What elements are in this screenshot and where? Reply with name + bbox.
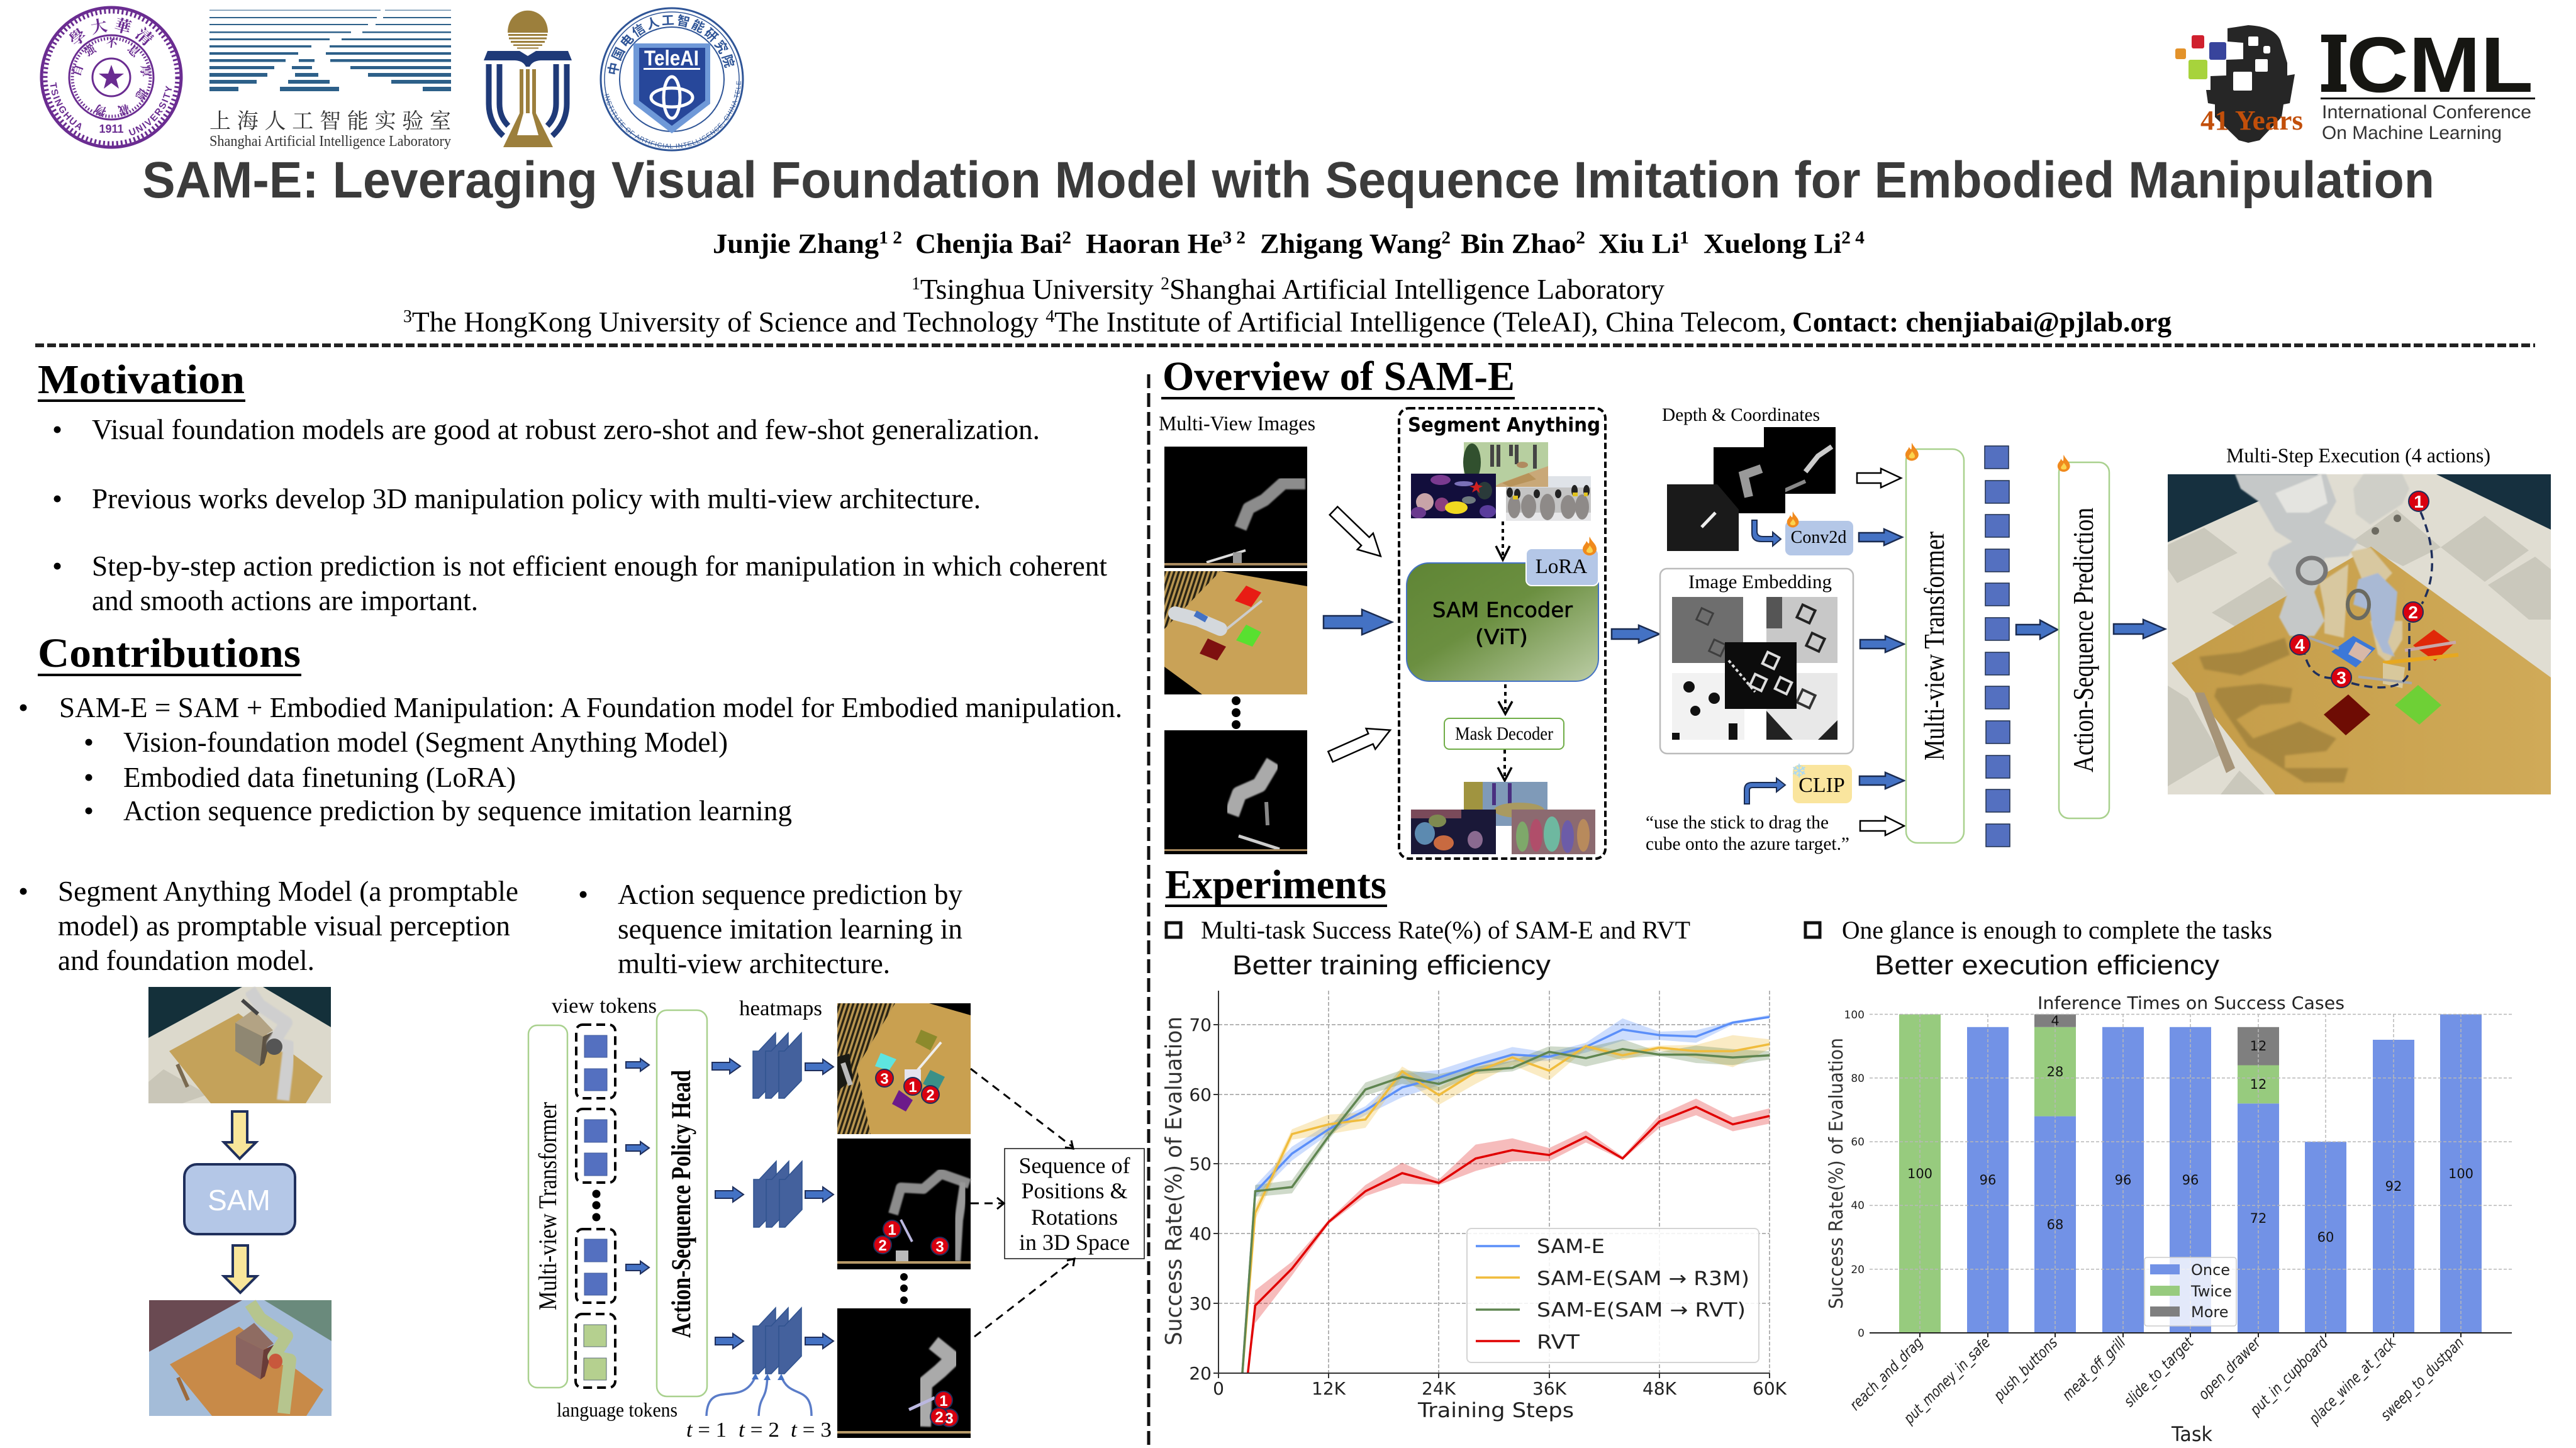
logo: Shanghai AI Laboratory: 上海人工智能实验室 — [209, 109, 451, 133]
affiliations: Contact: chenjiabai@pjlab.org — [1792, 306, 2172, 338]
dividers shadow — [35, 348, 2535, 352]
point numbers: 2 — [935, 1409, 944, 1426]
x labels — [1846, 1333, 2467, 1428]
value labels: 96 — [2115, 1172, 2131, 1188]
box: SAM Encoder — [1407, 563, 1598, 681]
y ticks — [1844, 1009, 1865, 1340]
labels: time steps: t = 1 — [686, 1418, 727, 1442]
x ticks: 48K — [1642, 1378, 1677, 1399]
execution points: 3 — [2336, 668, 2346, 688]
affiliations: 3 — [403, 307, 412, 326]
arrow: prediction to execution — [2114, 620, 2165, 638]
image: front view with predicted points — [837, 1308, 971, 1438]
point numbers — [878, 1071, 954, 1427]
value labels: 12 — [2250, 1039, 2267, 1054]
box: action-sequence policy head — [657, 1010, 707, 1396]
affiliations: The HongKong University of Science and Technology — [412, 306, 1045, 338]
box: multi-view transformer — [528, 1025, 567, 1388]
heading: Experiments: Experiments — [1165, 862, 1386, 908]
box: sequence output: in 3D Space — [1019, 1230, 1130, 1255]
token groups — [576, 1025, 615, 1388]
y ticks: 40 — [1189, 1223, 1212, 1244]
subheading: training — [1166, 916, 1690, 981]
predicted points — [874, 1069, 958, 1427]
table shadows — [2199, 638, 2348, 782]
authors: 2 — [1576, 228, 1585, 248]
logo: Tsinghua University: UNIVERSITY — [128, 86, 172, 135]
series: bands and lines — [1242, 1015, 1770, 1373]
text block: motivation bullets: • — [52, 550, 62, 582]
logo: Shanghai AI Laboratory: Shanghai Artificial Intelligence Laboratory — [209, 133, 451, 150]
box: Action-Sequence Prediction — [2059, 462, 2109, 818]
point numbers: 2 — [926, 1087, 935, 1104]
box: CLIP — [1793, 765, 1852, 803]
y ticks: 60 — [1189, 1084, 1212, 1105]
logo: ICML 41 Years: ICML — [2322, 21, 2533, 109]
value labels: 100 — [2448, 1166, 2473, 1181]
authors: 2 — [1441, 228, 1451, 248]
arrow: tokens to prediction — [2016, 620, 2058, 639]
text block: instruction: cube onto the azure target.” — [1646, 833, 1849, 854]
affiliations — [403, 273, 2172, 338]
text block: contributions bullets: Action sequence prediction by sequence imitation learning — [123, 794, 792, 827]
panel: Segment Anything — [1399, 408, 1605, 859]
image: segmented robot scene — [149, 1300, 332, 1416]
authors: 1 2 — [879, 228, 902, 248]
text block: SAM as foundation model — [18, 875, 518, 976]
authors: Haoran He — [1086, 228, 1217, 259]
y ticks: 40 — [1851, 1200, 1865, 1212]
authors: Xuelong Li — [1703, 228, 1835, 259]
box: LoRA: LoRA — [1536, 555, 1587, 578]
authors: 2 — [1062, 228, 1071, 248]
axis — [1870, 1333, 2512, 1337]
authors: Xiu Li — [1598, 228, 1675, 259]
box: sequence output — [1005, 1149, 1144, 1259]
box: SAM Encoder: SAM Encoder — [1432, 598, 1573, 622]
dashed execution path — [2305, 512, 2432, 688]
execution points: 4 — [2295, 635, 2305, 655]
logo: TeleAI: TeleAI — [644, 47, 699, 70]
axis titles: Task — [2171, 1422, 2212, 1446]
logo: TeleAI — [600, 8, 744, 151]
box: action-sequence policy head: Action-Sequence Policy Head — [667, 1070, 696, 1338]
box: Conv2d — [1785, 521, 1853, 555]
text block: motivation bullets — [52, 413, 1107, 616]
logo: Tsinghua University: 學大華清 — [69, 18, 154, 45]
labels: time steps: t = 3 — [791, 1418, 832, 1442]
value labels: 28 — [2047, 1064, 2063, 1079]
point numbers: 1 — [908, 1079, 917, 1096]
icon: flame LoRA — [1583, 537, 1597, 555]
grid — [1870, 1014, 2512, 1333]
value labels: 96 — [1980, 1172, 1996, 1188]
legend: More — [2191, 1303, 2228, 1321]
execution points: 1 — [2414, 492, 2424, 511]
icon: flame Conv2d — [1787, 511, 1798, 527]
y ticks: 60 — [1851, 1136, 1865, 1149]
x ticks: 36K — [1532, 1378, 1567, 1399]
logo: ICML 41 Years: On Machine Learning — [2322, 123, 2502, 143]
label: multi-view images: Multi-View Images — [1159, 413, 1315, 435]
value labels: 4 — [2051, 1013, 2060, 1028]
token column — [1985, 446, 2010, 847]
y ticks: 70 — [1189, 1015, 1212, 1035]
text block: contributions bullets: • — [18, 691, 28, 723]
logo: ICML 41 Years — [2175, 21, 2535, 143]
x ticks — [1213, 1378, 1787, 1399]
box: Multi-view Transformer: Multi-view Transformer — [1918, 532, 1950, 760]
affiliations: 2 — [1161, 274, 1169, 294]
y ticks: 20 — [1851, 1264, 1865, 1276]
logo: Shanghai AI Laboratory — [209, 10, 451, 150]
legend: Once — [2191, 1261, 2230, 1279]
labels: time steps — [686, 1418, 832, 1442]
arrow: view 2 to SAM — [1324, 610, 1392, 635]
y ticks: 100 — [1844, 1009, 1865, 1022]
text block: contributions bullets: • — [84, 761, 94, 793]
text block: contributions bullets: • — [84, 794, 94, 827]
authors: Zhigang Wang — [1260, 228, 1434, 259]
logo: Tsinghua University: TSINGHUA — [50, 82, 82, 131]
bars — [1899, 1014, 2482, 1333]
box: Action-Sequence Prediction: Action-Sequence Prediction — [2067, 508, 2099, 772]
dots between images — [900, 1273, 908, 1304]
x labels: put_money_in_safe — [1900, 1334, 1993, 1427]
heading: Overview of SAM-E: Overview of SAM-E — [1163, 354, 1515, 399]
box: CLIP: CLIP — [1798, 774, 1845, 797]
chart: inference times — [1826, 993, 2512, 1446]
legend: RVT — [1537, 1331, 1580, 1354]
chart title: Inference Times on Success Cases — [2038, 993, 2345, 1013]
icon: flame transformer — [1905, 443, 1919, 460]
box: sequence output: Rotations — [1031, 1205, 1118, 1230]
value labels — [1907, 1013, 2473, 1245]
image: depth view 2 — [1164, 730, 1307, 854]
heading: Segment Anything: Segment Anything — [1408, 414, 1600, 437]
text block: SAM as foundation model: • — [18, 875, 28, 907]
text block: action sequence prediction — [578, 878, 962, 979]
heading: Motivation: Motivation — [38, 357, 245, 403]
box: Mask Decoder: Mask Decoder — [1455, 723, 1553, 744]
box: Conv2d: Conv2d — [1791, 528, 1846, 547]
text block: action sequence prediction: sequence imitation learning in — [618, 913, 962, 945]
dotted arrow — [1498, 684, 1512, 714]
text block: contributions bullets: Vision-foundation model (Segment Anything Model) — [123, 726, 728, 758]
text block: SAM as foundation model: Segment Anything Model (a promptable — [58, 875, 518, 907]
text block: instruction: “use the stick to drag the — [1646, 812, 1829, 833]
authors: Bin Zhao — [1461, 228, 1571, 259]
arrowheads to output — [997, 1140, 1074, 1266]
box: SAM — [184, 1164, 295, 1234]
legend — [2144, 1257, 2236, 1326]
images: depth and coordinates — [1667, 427, 1836, 551]
x labels: meat_off_grill — [2059, 1334, 2129, 1404]
icon: snowflake: ❄ — [1791, 760, 1807, 782]
text block: action sequence prediction: multi-view architecture. — [618, 947, 890, 979]
value labels: 68 — [2047, 1217, 2063, 1232]
logo: Tsinghua University — [40, 6, 182, 148]
diagram: action-sequence policy head — [528, 994, 1144, 1442]
image: top view with predicted points — [837, 1003, 971, 1134]
icon: flame prediction — [2058, 455, 2070, 472]
subheading: execution: One glance is enough to complete the tasks — [1842, 916, 2272, 944]
y ticks: 30 — [1189, 1293, 1212, 1314]
legend: SAM-E(SAM → R3M) — [1537, 1267, 1749, 1290]
text block: motivation bullets: • — [52, 482, 62, 515]
x labels: open_drawer — [2195, 1333, 2265, 1403]
panel: Image Embedding: Image Embedding — [1688, 571, 1832, 593]
value labels: 60 — [2317, 1230, 2334, 1245]
authors — [713, 228, 1865, 259]
label: multi-step execution: Multi-Step Execution (4 actions) — [2226, 445, 2490, 467]
point numbers: 1 — [888, 1222, 896, 1239]
arrow: view 1 to SAM — [1325, 503, 1388, 564]
value labels: 96 — [2182, 1172, 2199, 1188]
text block: motivation bullets: Step-by-step action prediction is not efficient enough for manipulation in which coherent — [92, 550, 1107, 582]
subheading: execution — [1805, 916, 2272, 981]
labels: time steps: t = 2 — [739, 1418, 779, 1442]
affiliations: 1 — [912, 274, 920, 294]
box: sequence output: Sequence of — [1019, 1153, 1130, 1178]
arrows: into multi-view transformer — [1857, 469, 1904, 835]
authors: 2 4 — [1841, 228, 1865, 248]
arrow: view 3 to SAM — [1326, 720, 1395, 767]
point numbers: 3 — [880, 1071, 889, 1088]
image: depth view 1 — [1164, 447, 1307, 568]
affiliations: Shanghai Artificial Intelligence Laboratory — [1169, 273, 1664, 305]
y ticks: 0 — [1858, 1327, 1865, 1340]
legend: SAM-E(SAM → RVT) — [1537, 1299, 1746, 1322]
box: Mask Decoder — [1444, 718, 1564, 749]
arrow: curved to CLIP — [1744, 778, 1785, 804]
subheading: training: Multi-task Success Rate(%) of SAM-E and RVT — [1201, 916, 1690, 944]
text block: motivation bullets: and smooth actions are important. — [92, 584, 478, 616]
dashed arrows to output — [971, 1069, 1073, 1337]
image: robot scene input — [148, 987, 331, 1103]
point numbers: 1 — [939, 1393, 948, 1410]
x labels: put_in_cupboard — [2246, 1334, 2332, 1419]
arrows: head to heatmaps and images — [712, 1059, 834, 1349]
x ticks: 24K — [1422, 1378, 1456, 1399]
x labels: place_wine_at_rack — [2305, 1334, 2400, 1428]
text block: motivation bullets: Previous works develop 3D manipulation policy with multi-view architecture. — [92, 482, 981, 515]
logo: TeleAI: 中国电信人工智能研究院 — [607, 14, 735, 74]
grid — [1218, 991, 1770, 1373]
affiliations: 4 — [1045, 307, 1054, 326]
authors: 1 — [1680, 228, 1689, 248]
text block: action sequence prediction: Action sequence prediction by — [618, 878, 962, 910]
dotted arrow — [1496, 521, 1510, 560]
x labels: sweep_to_dustpan — [2377, 1334, 2467, 1424]
text block: motivation bullets: • — [52, 413, 62, 445]
chart: inference times: Success Rate(%) of Evaluation — [1826, 1038, 1848, 1309]
y ticks: 20 — [1189, 1363, 1212, 1384]
sample images — [1411, 442, 1591, 521]
arrowheads of time arrows — [752, 1373, 784, 1380]
box: Multi-view Transformer — [1906, 449, 1964, 843]
arrow: curved to Conv2d — [1752, 520, 1781, 546]
x labels: reach_and_drag — [1846, 1334, 1926, 1414]
box: LoRA — [1526, 549, 1598, 586]
value labels: 92 — [2385, 1179, 2402, 1194]
panel: Image Embedding — [1660, 569, 1853, 754]
arrows: tokens to head — [626, 1059, 649, 1274]
execution points — [2290, 491, 2429, 688]
affiliations: Tsinghua University — [920, 273, 1161, 305]
x ticks: 12K — [1312, 1378, 1346, 1399]
text block: motivation bullets: Visual foundation models are good at robust zero-shot and few-shot generalization. — [92, 413, 1040, 445]
subheading: training: Better training efficiency — [1232, 950, 1551, 981]
arrow: encoder to embedding — [1612, 625, 1659, 643]
x labels: slide_to_target — [2121, 1334, 2197, 1410]
box: SAM: SAM — [208, 1184, 270, 1217]
text block: contributions bullets — [18, 691, 1122, 827]
axis titles: Training Steps — [1417, 1398, 1574, 1422]
authors: Junjie Zhang — [713, 228, 871, 259]
dotted arrow — [1498, 750, 1512, 781]
text block: contributions bullets: • — [84, 726, 94, 758]
x ticks: 0 — [1213, 1378, 1224, 1399]
text block: contributions bullets: Embodied data finetuning (LoRA) — [123, 761, 516, 793]
text block: action sequence prediction: • — [578, 878, 588, 910]
x labels: push_buttons — [1990, 1334, 2061, 1405]
text block: SAM as foundation model: model) as promptable visual perception — [58, 910, 510, 942]
heading: Contributions: Contributions — [38, 630, 301, 676]
subheading: execution: Better execution efficiency — [1875, 950, 2219, 981]
logo: ICML 41 Years: International Conference — [2322, 102, 2531, 123]
label: heatmaps: heatmaps — [739, 997, 822, 1020]
label: view tokens: view tokens — [552, 994, 657, 1018]
image: top view scene — [1164, 571, 1307, 694]
label: depth and coordinates: Depth & Coordinates — [1662, 404, 1820, 425]
axes — [1213, 991, 1770, 1378]
chart: training curves — [1161, 991, 1787, 1422]
logo: HKUST — [484, 11, 572, 147]
text block: contributions bullets: SAM-E = SAM + Embodied Manipulation: A Foundation model for Embodied manipulation. — [59, 691, 1122, 723]
segmented sample images — [1411, 782, 1595, 854]
point numbers: 3 — [945, 1410, 954, 1427]
y ticks: 80 — [1851, 1072, 1865, 1085]
box: SAM Encoder: (ViT) — [1475, 625, 1528, 649]
y ticks — [1189, 1015, 1212, 1384]
authors: Chenjia Bai — [915, 228, 1056, 259]
value labels: 100 — [1907, 1166, 1932, 1181]
robot translucent poses — [2235, 474, 2409, 663]
embedding maps — [1672, 597, 1837, 740]
box: sequence output: Positions & — [1021, 1178, 1128, 1203]
image: multi-step execution scene — [2168, 474, 2551, 794]
curved time arrows — [706, 1376, 811, 1416]
y ticks: 50 — [1189, 1154, 1212, 1174]
legend: SAM-E — [1537, 1235, 1605, 1258]
dots between views — [1232, 696, 1241, 729]
title: SAM-E: Leveraging Visual Foundation Model with Sequence Imitation for Embodied Manipulation — [142, 152, 2434, 209]
point numbers: 2 — [878, 1237, 887, 1254]
arrow: down to SAM — [224, 1111, 256, 1159]
authors: 3 2 — [1223, 228, 1246, 248]
legend: Twice — [2190, 1283, 2232, 1300]
logo: Tsinghua University: 1911 — [99, 123, 124, 135]
text block: instruction — [1646, 812, 1849, 854]
text block: SAM as foundation model: and foundation model. — [58, 944, 315, 976]
value labels: 72 — [2250, 1211, 2267, 1226]
arrow: down from SAM — [224, 1245, 257, 1293]
value labels: 12 — [2250, 1077, 2267, 1092]
x ticks: 60K — [1753, 1378, 1787, 1399]
image: side view with predicted points — [837, 1139, 971, 1269]
box: multi-view transformer: Multi-view Transformer — [533, 1102, 562, 1310]
logo: ICML 41 Years: 41 Years — [2200, 105, 2303, 136]
logo: Tsinghua University: 自強不息厚德載物 — [72, 38, 151, 117]
point numbers: 3 — [935, 1239, 944, 1256]
affiliations: The Institute of Artificial Intelligence (TeleAI), China Telecom, — [1054, 306, 1787, 338]
legend — [1467, 1228, 1759, 1362]
chart: training curves: Success Rate(%) of Evaluation — [1161, 1016, 1187, 1345]
label: language tokens: language tokens — [557, 1398, 677, 1421]
execution points: 2 — [2408, 603, 2418, 622]
heatmap stacks — [753, 1033, 802, 1374]
